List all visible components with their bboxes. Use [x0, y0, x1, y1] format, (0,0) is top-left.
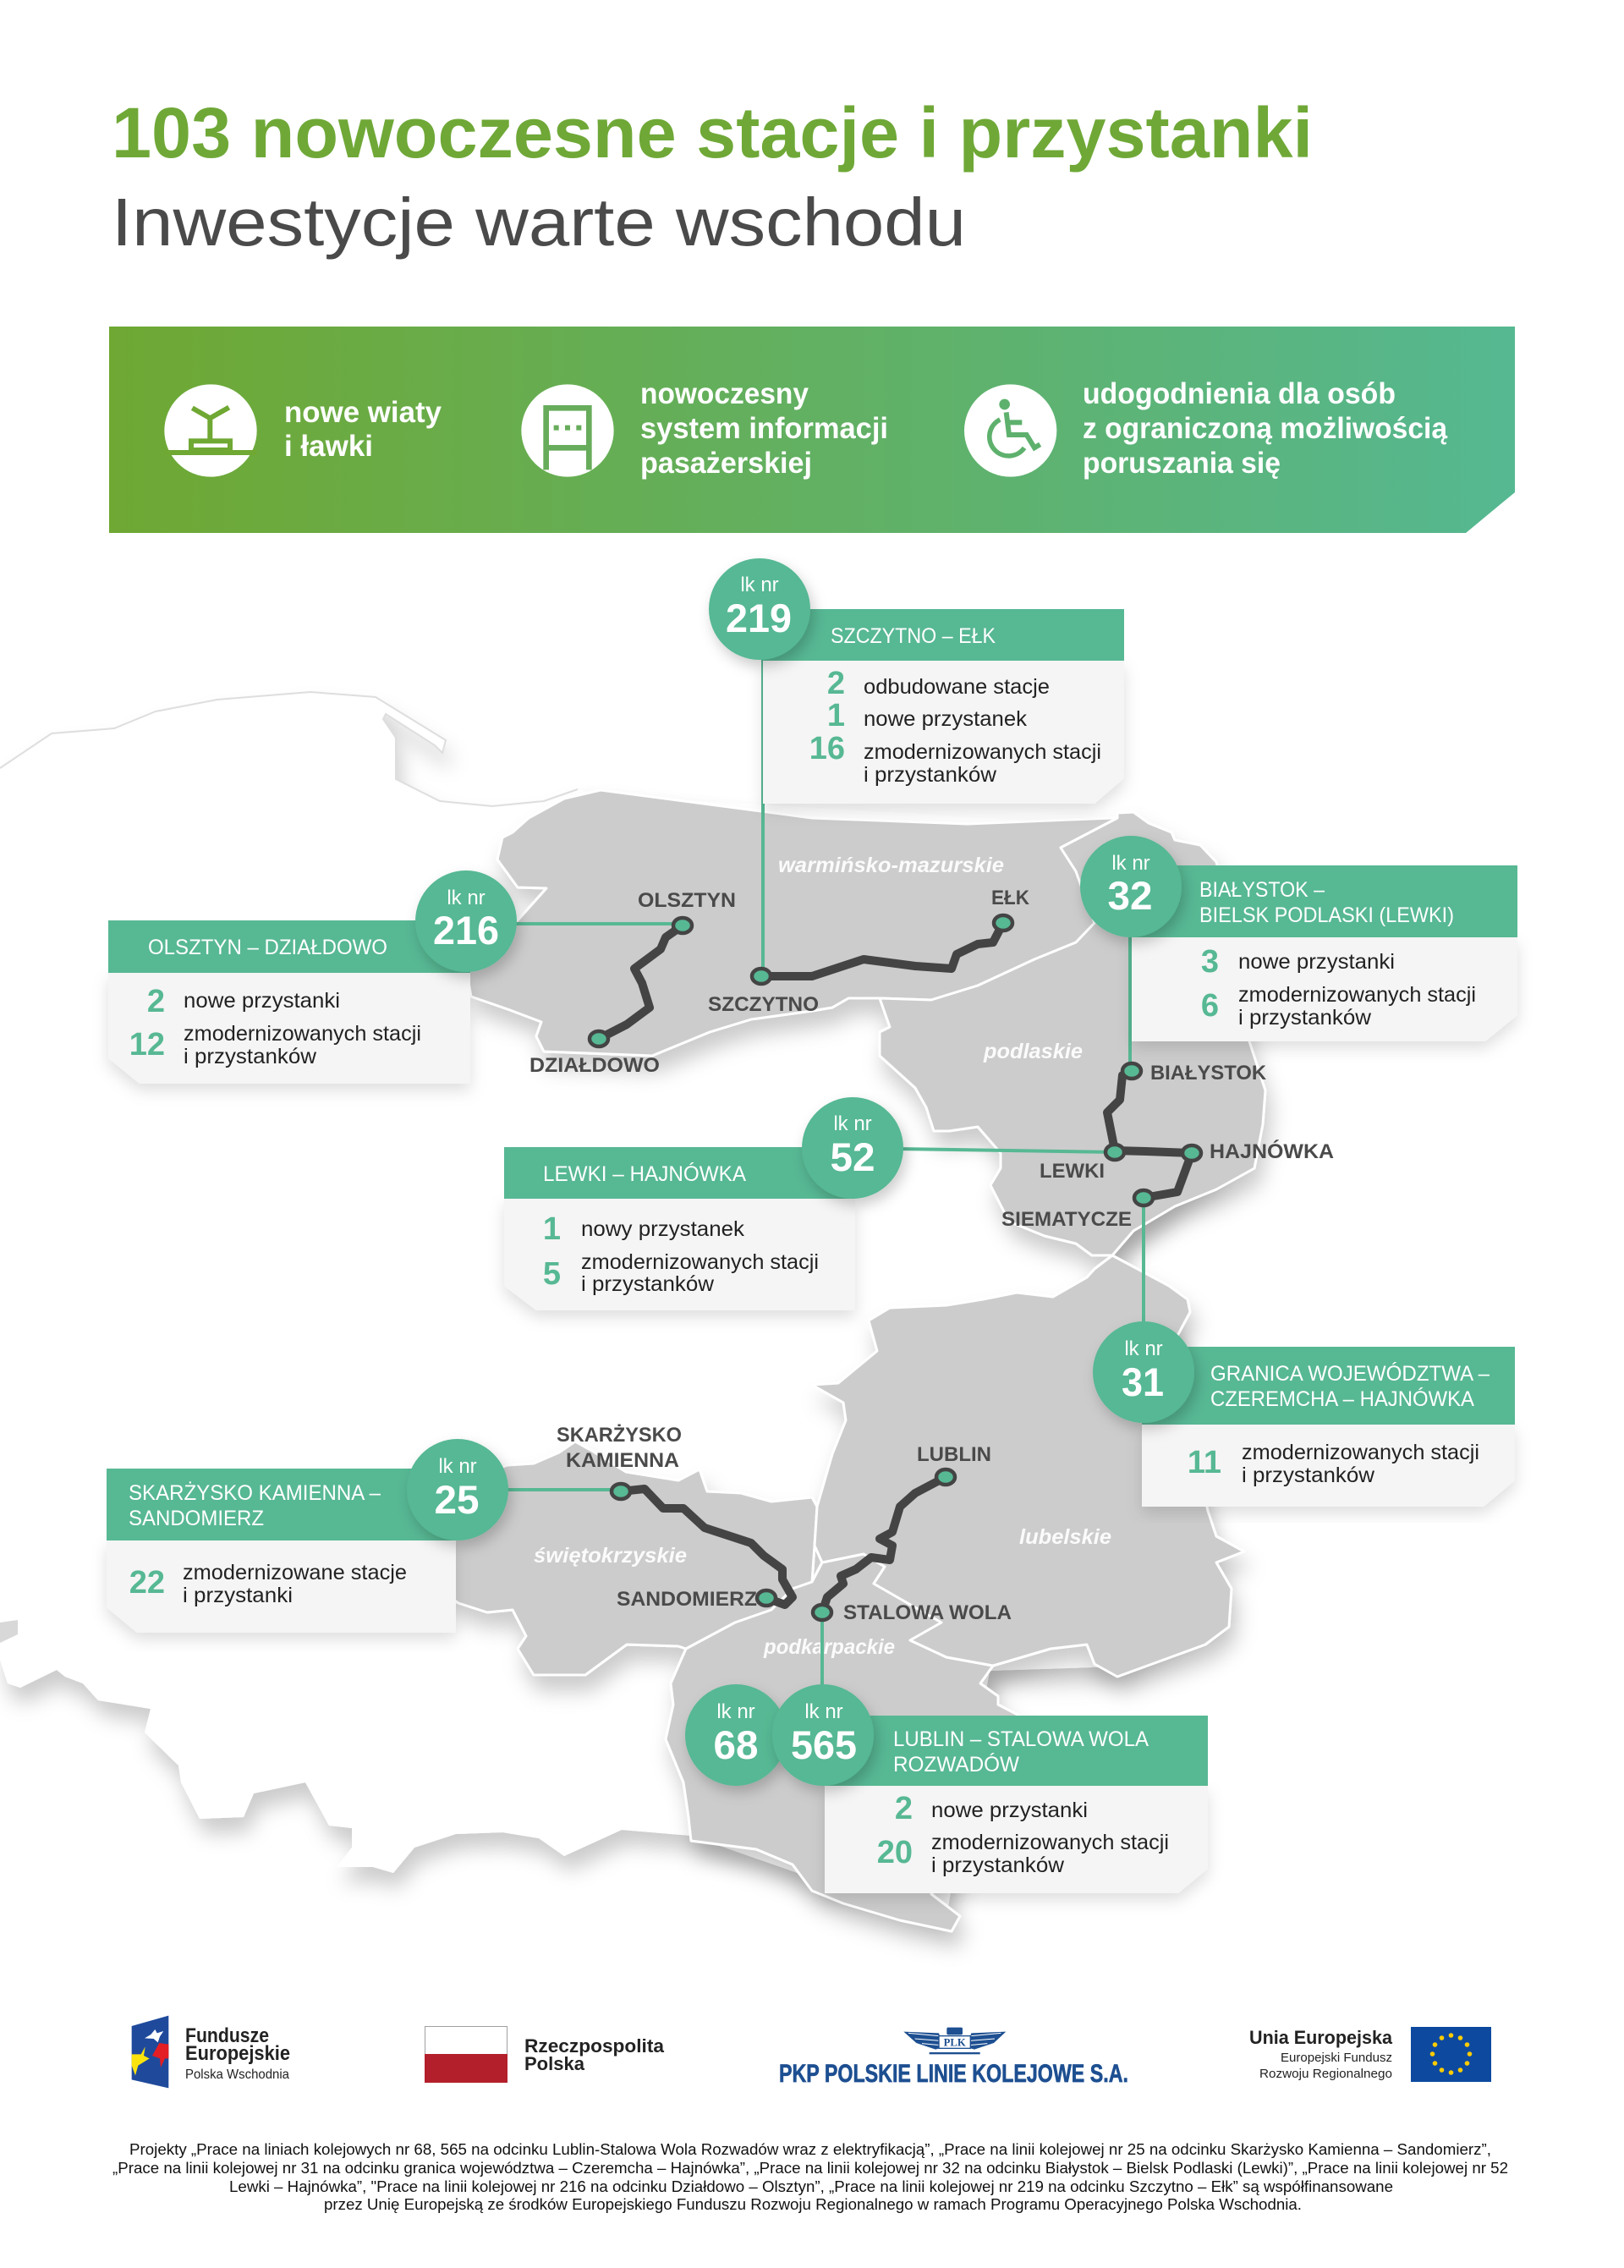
region: podkarpackie: [666, 1554, 1019, 1931]
text: accessibility: z ograniczoną możliwością: [1083, 412, 1448, 445]
panel: line 219 Szczytno – Ełk: 1: [827, 698, 845, 733]
logo: Unia Europejska: Europejski Fundusz: [1281, 2051, 1392, 2065]
panel: line 31 Granica województwa – Czeremcha – Hajnówka: zmodernizowanych stacji: [1242, 1441, 1479, 1464]
panel: lines 68 and 565 Lublin – Stalowa Wola Rozwadów: [825, 1716, 1208, 1893]
footer note: Projekty „Prace na liniach kolejowych nr 68, 565 na odcinku Lublin-Stalowa Wola Rozwadów wraz z elektryfikacją”, „Prace na linii kolejowej nr 25 na odcinku Skarżysko Kamienna – Sandomierz”,: [129, 2141, 1491, 2158]
city labels: STALOWA WOLA: [843, 1601, 1012, 1624]
text: shelters: [284, 396, 442, 463]
panel: line 52 Lewki – Hajnówka: zmodernizowanych stacji: [581, 1250, 819, 1274]
panel: line 219 Szczytno – Ełk: 2: [827, 666, 845, 701]
panel: line 219 Szczytno – Ełk: [761, 609, 1124, 804]
badge: lk nr 68: lk nr: [716, 1700, 755, 1723]
panel: line 216 Olsztyn – Działdowo: 12: [129, 1027, 165, 1063]
logo: Fundusze Europejskie: Europejskie: [185, 2042, 290, 2065]
panel: line 52 Lewki – Hajnówka: 1: [543, 1211, 561, 1247]
badge: lk nr 32: 32: [1108, 873, 1152, 918]
text: information system: pasażerskiej: [640, 447, 812, 480]
text: shelters: nowe wiaty: [284, 396, 442, 429]
region: warmińsko-mazurskie: [465, 790, 1117, 1056]
map: western fragment: [0, 1620, 18, 1643]
panel: line 32 Białystok – Bielsk Podlaski: zmodernizowanych stacji: [1238, 983, 1476, 1007]
panel: lines 68 and 565 Lublin – Stalowa Wola Rozwadów: 2: [895, 1791, 913, 1826]
panel: line 31 Granica województwa – Czeremcha – Hajnówka: i przystanków: [1242, 1463, 1375, 1487]
badge: lk nr 68: 68: [714, 1722, 758, 1767]
emblem: PLK winged badge: [903, 2028, 1006, 2054]
badge: lk nr 32: [1080, 836, 1182, 937]
panel: line 219 Szczytno – Ełk: odbudowane stacje: [864, 675, 1050, 699]
panel: line 216 Olsztyn – Działdowo: OLSZTYN – DZIAŁDOWO: [148, 936, 387, 959]
panel: line 219 Szczytno – Ełk: 16: [809, 731, 845, 766]
badge: lk nr 52: lk nr: [833, 1112, 872, 1135]
badge: lk nr 52: [802, 1097, 903, 1199]
logo: Rzeczpospolita Polska: Rzeczpospolita: [524, 2035, 665, 2057]
badge: lk nr 25: lk nr: [438, 1455, 477, 1478]
panel: lines 68 and 565 Lublin – Stalowa Wola Rozwadów: nowe przystanki: [931, 1798, 1088, 1822]
icon: shelter and bench: [163, 384, 257, 477]
badge: lk nr 25: [407, 1439, 508, 1540]
panel: line 25 Skarżysko Kamienna – Sandomierz: i przystanki: [183, 1584, 293, 1607]
logo: Unia Europejska: Unia Europejska: [1249, 2027, 1393, 2048]
panel: line 31 Granica województwa – Czeremcha – Hajnówka: 11: [1188, 1445, 1221, 1480]
logo: PKP Polskie Linie Kolejowe: PKP POLSKIE LINIE KOLEJOWE S.A.: [779, 2060, 1128, 2088]
emblem: PLK winged badge: PLK: [944, 2037, 966, 2049]
panel: line 32 Białystok – Bielsk Podlaski: BIAŁYSTOK –: [1199, 878, 1325, 902]
badge: lk nr 31: [1093, 1321, 1194, 1423]
badge: lk nr 216: lk nr: [447, 887, 486, 909]
city labels: EŁK: [991, 887, 1030, 909]
map: Baltic coast line: [0, 692, 578, 806]
panel: line 32 Białystok – Bielsk Podlaski: 3: [1201, 944, 1219, 980]
icon: wheelchair: [964, 384, 1056, 477]
footer note: „Prace na linii kolejowej nr 31 na odcinku granica województwa – Czeremcha – Hajnówka”, „Prace na linii kolejowej nr 32 na odcinku Białystok – Bielsk Podlaski (Lewki)”, „Prace na linii kolejowej nr 52: [112, 2160, 1508, 2177]
city labels: LUBLIN: [917, 1443, 991, 1466]
badge: lk nr 52: 52: [831, 1134, 875, 1179]
badge: lk nr 219: 219: [726, 596, 792, 640]
panel: line 219 Szczytno – Ełk: i przystanków: [864, 763, 997, 787]
text: information system: nowoczesny: [640, 377, 809, 410]
footer note: przez Unię Europejską ze środków Europejskiego Funduszu Rozwoju Regionalnego w ramach Programu Operacyjnego Polska Wschodnia.: [324, 2196, 1302, 2213]
panel: line 31 Granica województwa – Czeremcha – Hajnówka: GRANICA WOJEWÓDZTWA –: [1210, 1361, 1490, 1386]
city labels: OLSZTYN: [638, 889, 736, 912]
map of Poland: [0, 692, 1265, 1931]
panel: line 216 Olsztyn – Działdowo: nowe przystanki: [184, 989, 340, 1013]
text: accessibility: poruszania się: [1083, 447, 1281, 480]
logo: Rzeczpospolita Polska: [425, 2027, 665, 2083]
badge: lk nr 31: 31: [1122, 1359, 1164, 1404]
panel: line 25 Skarżysko Kamienna – Sandomierz: 22: [129, 1565, 165, 1601]
badge: lk nr 68: [685, 1684, 787, 1786]
panel: line 216 Olsztyn – Działdowo: 2: [147, 984, 165, 1019]
panel: lines 68 and 565 Lublin – Stalowa Wola Rozwadów: i przystanków: [931, 1853, 1065, 1877]
city labels: KAMIENNA: [566, 1449, 679, 1472]
region labels: [534, 854, 1111, 1659]
panel: lines 68 and 565 Lublin – Stalowa Wola Rozwadów: 20: [877, 1835, 913, 1870]
station markers: [590, 915, 1201, 1620]
panel: line 25 Skarżysko Kamienna – Sandomierz: SANDOMIERZ: [129, 1507, 264, 1530]
icon: passenger information display: [521, 384, 614, 477]
text: accessibility: udogodnienia dla osób: [1083, 377, 1396, 410]
emblem: star flag: [132, 2016, 168, 2088]
panel: benefits banner: [109, 327, 1515, 533]
city labels: HAJNÓWKA: [1210, 1139, 1334, 1163]
title: 103 nowoczesne stacje i przystanki: [112, 93, 1313, 173]
logo: Fundusze Europejskie: Polska Wschodnia: [185, 2068, 289, 2082]
footer note: [112, 2141, 1508, 2213]
panel: line 25 Skarżysko Kamienna – Sandomierz: SKARŻYSKO KAMIENNA –: [129, 1480, 381, 1505]
region: świętokrzyskie: [440, 1442, 817, 1675]
subtitle: Inwestycje warte wschodu: [112, 184, 966, 260]
logo: Rzeczpospolita Polska: Polska: [524, 2053, 585, 2074]
badge: lk nr 219: [709, 558, 810, 660]
badge: lk nr 565: lk nr: [804, 1700, 843, 1723]
badge: lk nr 219: lk nr: [740, 574, 779, 596]
panel: lines 68 and 565 Lublin – Stalowa Wola Rozwadów: ROZWADÓW: [893, 1752, 1019, 1777]
panel: line 25 Skarżysko Kamienna – Sandomierz: zmodernizowane stacje: [183, 1561, 407, 1584]
panel: line 25 Skarżysko Kamienna – Sandomierz: [107, 1469, 456, 1633]
text: accessibility: [1083, 377, 1448, 480]
map: grey voivodeships: [440, 790, 1265, 1931]
city labels: LEWKI: [1040, 1160, 1105, 1183]
panel: line 52 Lewki – Hajnówka: LEWKI – HAJNÓWKA: [543, 1161, 746, 1186]
region: lubelskie: [812, 1255, 1244, 1677]
region: podlaskie: [880, 812, 1265, 1255]
panel: lines 68 and 565 Lublin – Stalowa Wola Rozwadów: zmodernizowanych stacji: [931, 1831, 1169, 1854]
city labels: [529, 887, 1334, 1624]
panel: line 219 Szczytno – Ełk: SZCZYTNO – EŁK: [831, 624, 996, 648]
badge: lk nr 25: 25: [435, 1477, 479, 1522]
badge: lk nr 216: [415, 870, 517, 972]
panel: line 32 Białystok – Bielsk Podlaski: i przystanków: [1238, 1006, 1372, 1030]
logo: Fundusze Europejskie: Fundusze: [185, 2024, 269, 2047]
badge: lk nr 216: 216: [433, 908, 499, 953]
badge: lk nr 32: lk nr: [1111, 852, 1150, 875]
badge: lk nr 31: lk nr: [1124, 1337, 1163, 1360]
rail lines: [599, 923, 1192, 1612]
region labels: lubelskie: [1019, 1525, 1111, 1549]
panel: line 32 Białystok – Bielsk Podlaski: [1132, 865, 1517, 1041]
panel: line 52 Lewki – Hajnówka: nowy przystanek: [581, 1217, 745, 1241]
logo: PKP Polskie Linie Kolejowe: [779, 2028, 1128, 2088]
logo: Fundusze Europejskie: [132, 2016, 290, 2088]
text: shelters: i ławki: [284, 430, 373, 463]
panel: line 32 Białystok – Bielsk Podlaski: BIELSK PODLASKI (LEWKI): [1199, 903, 1454, 927]
badge: lk nr 565: 565: [791, 1722, 857, 1767]
panel: line 219 Szczytno – Ełk: zmodernizowanych stacji: [864, 740, 1101, 764]
city labels: DZIAŁDOWO: [529, 1054, 660, 1077]
panel: line 31 Granica województwa – Czeremcha – Hajnówka: [1142, 1347, 1515, 1507]
text: information system: [640, 377, 888, 480]
panel: line 32 Białystok – Bielsk Podlaski: nowe przystanki: [1238, 950, 1395, 974]
panel: line 52 Lewki – Hajnówka: 5: [543, 1256, 561, 1292]
leader lines: [503, 651, 1144, 1692]
panel: line 219 Szczytno – Ełk: nowe przystanek: [864, 707, 1028, 731]
city labels: SANDOMIERZ: [617, 1588, 757, 1611]
city labels: SIEMATYCZE: [1001, 1208, 1132, 1231]
city labels: SKARŻYSKO: [557, 1424, 682, 1447]
city labels: BIAŁYSTOK: [1150, 1062, 1267, 1085]
city labels: SZCZYTNO: [708, 993, 819, 1016]
logo: Unia Europejska: Rozwoju Regionalnego: [1259, 2067, 1392, 2081]
region labels: świętokrzyskie: [534, 1544, 687, 1568]
panel: line 52 Lewki – Hajnówka: i przystanków: [581, 1272, 715, 1296]
region labels: podlaskie: [983, 1040, 1083, 1063]
region labels: warmińsko-mazurskie: [778, 854, 1004, 877]
panel: line 216 Olsztyn – Działdowo: i przystanków: [184, 1045, 317, 1068]
panel: line 31 Granica województwa – Czeremcha – Hajnówka: CZEREMCHA – HAJNÓWKA: [1210, 1387, 1474, 1411]
panel: line 52 Lewki – Hajnówka: [504, 1147, 855, 1310]
panel: line 216 Olsztyn – Działdowo: [108, 920, 470, 1084]
region labels: podkarpackie: [763, 1635, 895, 1659]
panel: line 216 Olsztyn – Działdowo: zmodernizowanych stacji: [184, 1022, 421, 1046]
badge: lk nr 565: [772, 1684, 874, 1786]
text: information system: system informacji: [640, 412, 888, 445]
footer note: Lewki – Hajnówka”, "Prace na linii kolejowej nr 216 na odcinku Działdowo – Olsztyn”, „Prace na linii kolejowej nr 219 na odcinku Szczytno – Ełk” są współfinansowane: [229, 2178, 1393, 2195]
panel: line 32 Białystok – Bielsk Podlaski: 6: [1201, 988, 1219, 1024]
logo: Unia Europejska: [1249, 2027, 1491, 2082]
panel: lines 68 and 565 Lublin – Stalowa Wola Rozwadów: LUBLIN – STALOWA WOLA: [893, 1727, 1149, 1751]
map: white country outline: [0, 692, 1243, 1912]
